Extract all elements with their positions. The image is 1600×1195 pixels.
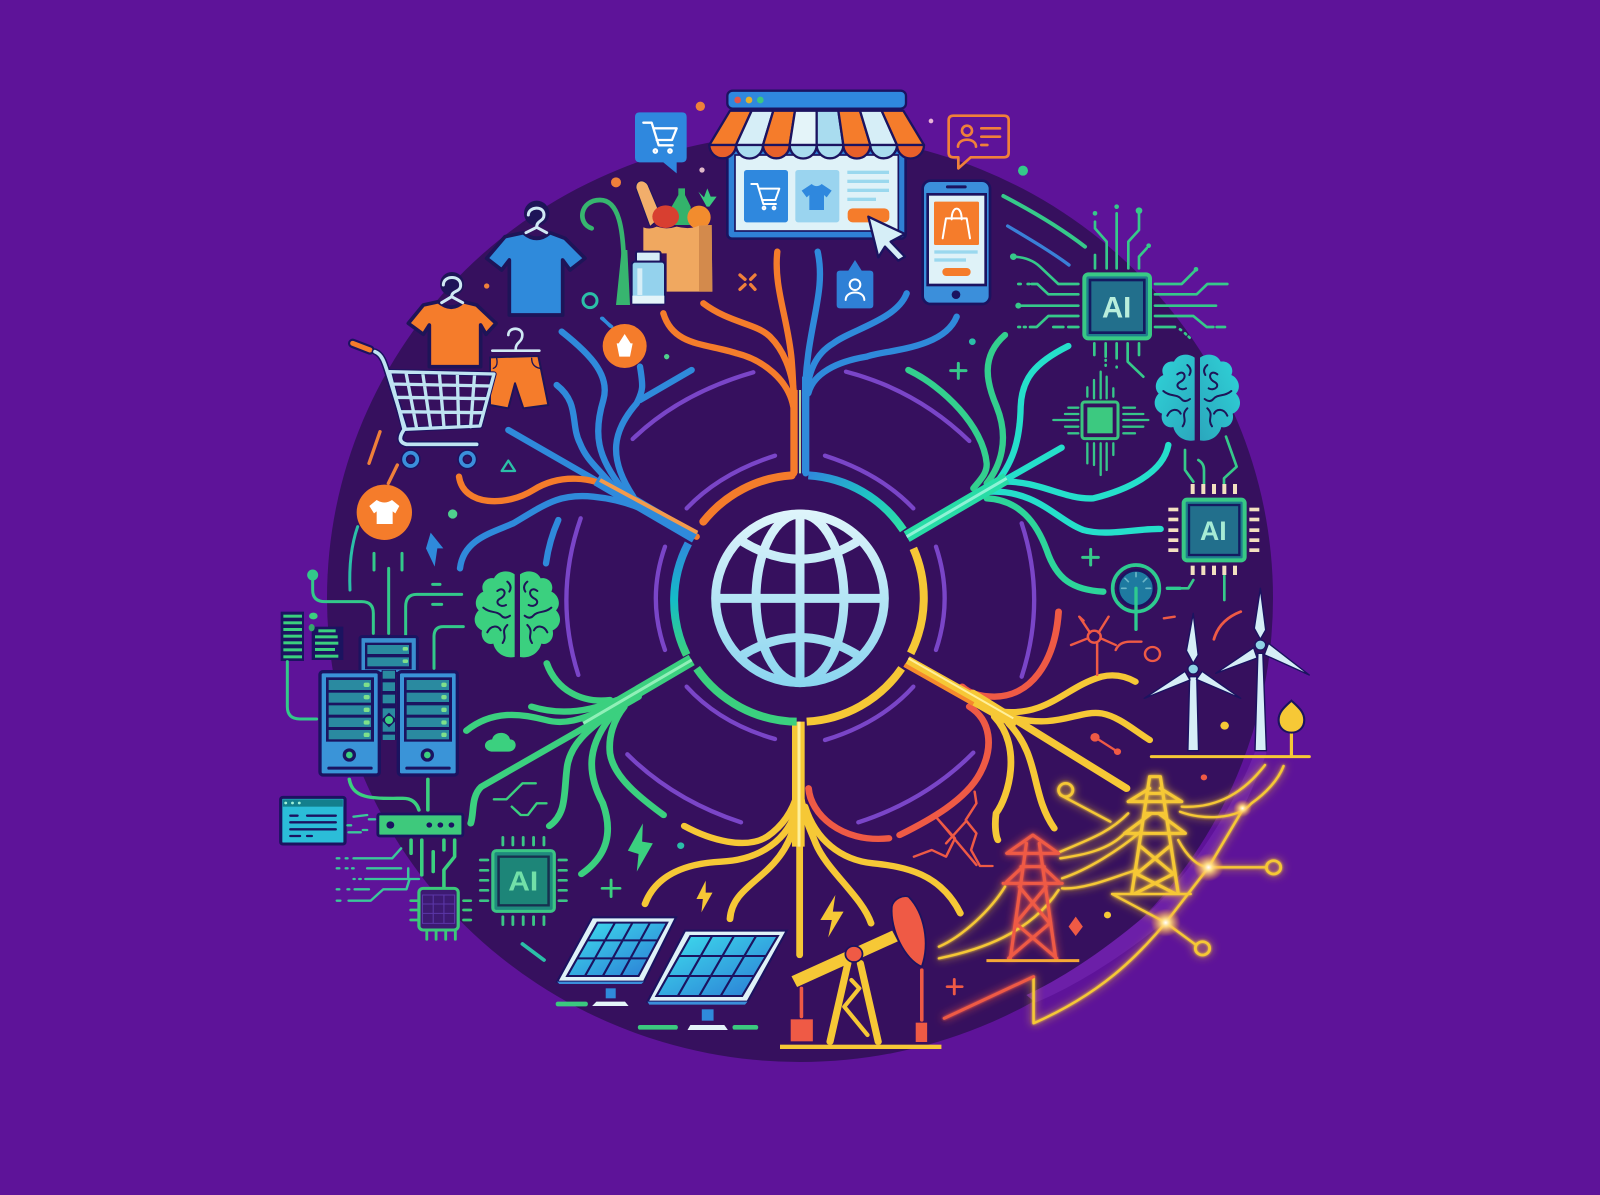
storefront and commerce icons <box>582 91 1028 345</box>
plus signs and dot <box>951 340 1098 565</box>
globe icon <box>716 514 884 683</box>
icon: teal brain <box>1155 355 1240 441</box>
branches: energy lower right <box>800 612 1150 955</box>
icon: yellow pylon <box>1125 777 1185 893</box>
sparkles <box>1151 800 1252 937</box>
icon: shopping cart <box>353 343 494 466</box>
icon: cart speech bubble <box>635 112 687 173</box>
branches: AI upper right <box>908 196 1168 592</box>
circuit lines to servers <box>309 527 463 668</box>
red circuit wheel <box>1071 612 1241 675</box>
branches: energy bottom left <box>645 793 799 919</box>
icon: grocery bag <box>636 181 717 292</box>
branches: commerce upper left <box>459 318 697 568</box>
plus and dashes <box>522 844 683 960</box>
icon: mouse cursor <box>868 217 905 261</box>
icon: AI chip lower left <box>480 837 566 925</box>
icon: shop awning <box>709 91 924 158</box>
lower left tech icons <box>281 733 787 1030</box>
icon: jar <box>632 252 665 304</box>
green curved hook <box>582 200 630 305</box>
glowing power grid <box>939 765 1284 1023</box>
icon: document stacks <box>281 612 343 661</box>
small triangle and dot <box>448 461 515 519</box>
icon: browser shop window <box>727 150 906 239</box>
icon: small chip <box>411 888 471 939</box>
decorative shop dots <box>583 102 1028 345</box>
data stream dashes <box>337 815 419 901</box>
branches: commerce top <box>663 252 957 473</box>
icon: orange shirt <box>408 272 496 367</box>
icon: AI chip top: AI <box>1102 291 1131 324</box>
AI chips and brain, right side <box>951 204 1259 600</box>
icon: left server tower <box>320 672 379 775</box>
icon: solar panel left <box>556 917 676 1006</box>
icon: green cloud <box>485 733 516 752</box>
icon: center processor <box>1053 372 1148 475</box>
server cluster <box>281 612 457 775</box>
icon: green lightning <box>628 823 653 872</box>
icon: oil pump jack <box>780 896 941 1049</box>
icon: solar panel right <box>638 931 787 1030</box>
energy icons <box>780 588 1309 1049</box>
icon: blue shirt <box>487 201 585 315</box>
icon: rear server <box>360 637 417 740</box>
ground line with small tree <box>1151 701 1309 780</box>
icon: right server tower <box>398 672 457 775</box>
icon: smartphone with shopping bag <box>923 181 990 304</box>
icon: tree gauge <box>1113 565 1180 629</box>
icon: teal code window <box>281 797 345 844</box>
connector line <box>287 662 317 719</box>
icon: AI chip lower right <box>1168 437 1259 600</box>
lighter crescent band <box>1026 737 1266 1003</box>
icon: green brain <box>475 571 560 657</box>
icon: AI chip top <box>1010 204 1227 377</box>
icon: orange shorts <box>490 329 548 408</box>
wires <box>1060 813 1141 888</box>
network router and cabling <box>349 779 463 887</box>
purple arcs <box>566 372 1034 822</box>
icon: lightning yellow <box>820 895 844 937</box>
icon: orange shirt badge <box>357 432 412 540</box>
branches: AI lower left <box>466 663 664 874</box>
circuit squiggle <box>494 783 546 815</box>
red link pin <box>1090 733 1121 755</box>
small marks <box>947 912 1111 994</box>
dark central circle <box>327 134 1273 1062</box>
icon: AI chip lower left: AI <box>508 867 538 897</box>
small dots <box>484 283 669 359</box>
apparel icons <box>408 201 669 367</box>
pylon base <box>986 956 1079 965</box>
icon: blue lightning <box>426 533 443 567</box>
icon: orange cupcake badge <box>603 318 647 368</box>
icon: red pylon <box>1003 835 1062 958</box>
icon: user tag <box>837 260 873 308</box>
hub spokes, ring and arcs <box>566 372 1034 847</box>
icon: AI chip lower right: AI <box>1200 516 1227 546</box>
branching network <box>459 196 1168 955</box>
icon: profile speech bubble <box>949 116 1009 168</box>
zigzag <box>944 977 1034 1018</box>
icon: wind turbines <box>1144 588 1309 751</box>
broken red circuit <box>914 792 992 866</box>
icon: yellow lightning <box>696 881 712 912</box>
icons left side <box>309 318 647 668</box>
